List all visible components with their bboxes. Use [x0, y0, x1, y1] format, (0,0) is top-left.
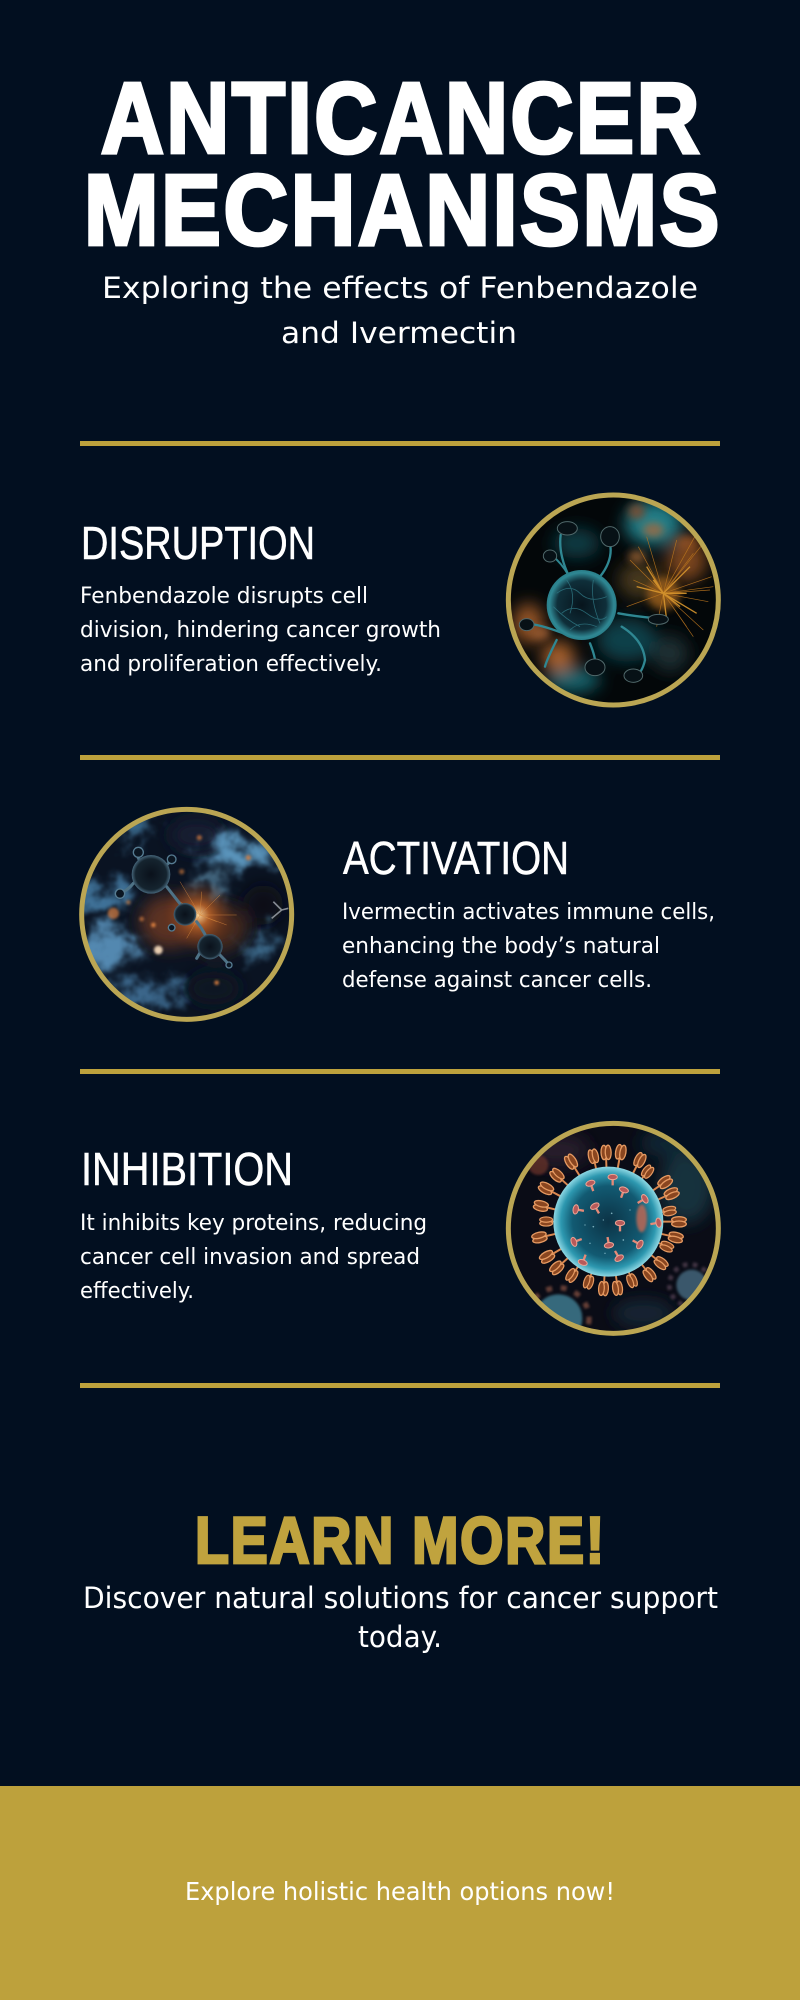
heading: inhibition: INHIBITION — [81, 1143, 293, 1195]
subtitle: Exploring the effects of Fenbendazole — [102, 271, 698, 305]
call to action text: Discover natural solutions for cancer support — [83, 1581, 718, 1615]
text block: disruption: Fenbendazole disrupts cell — [80, 584, 368, 609]
image: spiked virus particle — [503, 1120, 723, 1349]
title: MECHANISMS — [84, 154, 722, 266]
title — [84, 62, 722, 266]
text block: activation: defense against cancer cells. — [342, 968, 652, 993]
footer text: Explore holistic health options now! — [185, 1877, 615, 1906]
image: teal cell with orange filaments — [503, 490, 723, 710]
heading: activation: ACTIVATION — [343, 832, 569, 884]
call to action text — [83, 1581, 718, 1654]
text block: inhibition: effectively. — [80, 1279, 194, 1304]
panel: inhibition — [80, 1120, 723, 1349]
text block: activation — [342, 900, 715, 993]
panel: disruption — [80, 490, 723, 710]
text block: disruption: division, hindering cancer growth — [80, 618, 441, 643]
text block: activation: Ivermectin activates immune cells, — [342, 900, 715, 925]
text block: inhibition — [80, 1211, 427, 1304]
panel: activation — [75, 805, 715, 1025]
call to action text: today. — [358, 1620, 442, 1654]
text block: activation: enhancing the body’s natural — [342, 934, 660, 959]
footer band — [0, 1786, 800, 2000]
text block: disruption: and proliferation effectively. — [80, 652, 382, 677]
subtitle: and Ivermectin — [281, 316, 517, 350]
text block: inhibition: cancer cell invasion and spread — [80, 1245, 420, 1270]
call to action heading: LEARN MORE! — [195, 1503, 606, 1577]
text block: disruption — [80, 584, 441, 677]
title: ANTICANCER — [101, 62, 702, 174]
subtitle — [102, 271, 698, 350]
text block: inhibition: It inhibits key proteins, reducing — [80, 1211, 427, 1236]
image: dividing cells in blue haze — [75, 805, 297, 1025]
heading: disruption: DISRUPTION — [81, 517, 315, 569]
